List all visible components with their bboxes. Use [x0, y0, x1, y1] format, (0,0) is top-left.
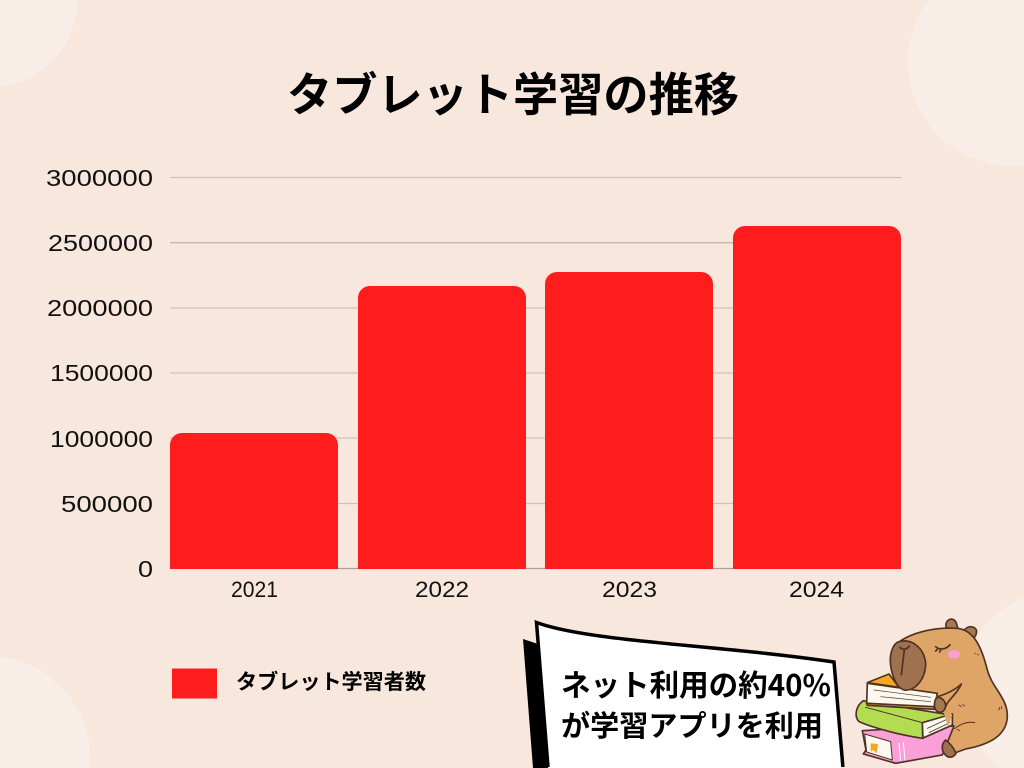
- y axis labels: 500000: [61, 491, 153, 517]
- bar: 2022: [358, 286, 526, 569]
- y axis labels: 2000000: [47, 295, 153, 321]
- legend: [172, 666, 426, 698]
- callout text: ネット利用の約40%: [561, 661, 831, 705]
- x axis labels: 2023: [602, 577, 657, 602]
- x axis labels: 2021: [231, 577, 278, 602]
- y axis labels: 0: [138, 556, 153, 582]
- cheek: [948, 650, 960, 659]
- arm: [936, 684, 961, 727]
- snout: [890, 641, 926, 690]
- bar chart: [46, 165, 901, 602]
- x axis labels: 2024: [789, 577, 844, 602]
- callout: [523, 622, 843, 768]
- callout: が学習アプリを利用: [561, 703, 823, 745]
- legend label: タブレット学習者数: [236, 666, 426, 696]
- ears: [946, 619, 958, 629]
- green book: [856, 701, 952, 738]
- pink book: [862, 726, 954, 763]
- orange book: [867, 674, 899, 687]
- bar: 2023: [545, 272, 713, 569]
- fur marks: [957, 653, 1002, 731]
- hind foot: [942, 740, 956, 757]
- title: タブレット学習の推移: [287, 59, 739, 125]
- y axis labels: 1500000: [50, 360, 153, 386]
- x axis labels: [231, 577, 844, 602]
- y axis labels: [46, 165, 153, 582]
- icon: capybara with books: [856, 619, 1007, 763]
- y axis labels: 3000000: [46, 165, 153, 191]
- y axis labels: 2500000: [48, 230, 153, 256]
- capybara body: [896, 628, 1007, 753]
- bar: 2021: [170, 433, 338, 569]
- bar: 2024: [733, 226, 901, 569]
- x axis labels: 2022: [415, 577, 469, 602]
- legend swatch: [172, 668, 217, 698]
- y axis labels: 1000000: [50, 426, 153, 452]
- closed eye: [936, 645, 950, 652]
- hand: [934, 697, 946, 712]
